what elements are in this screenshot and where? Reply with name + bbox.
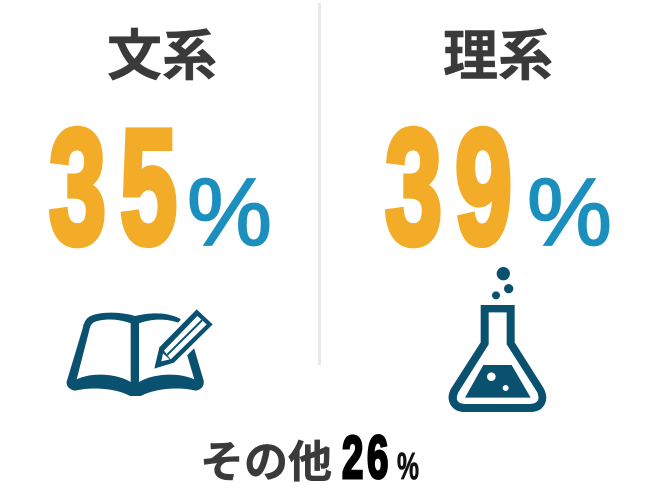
unit: 35 percent sign: % <box>187 159 272 266</box>
figure: 35: 5 <box>120 96 177 278</box>
heading: 文系: 文系 <box>107 25 217 87</box>
figure: 26 <box>342 423 388 488</box>
figure: 35: 3 <box>49 96 106 278</box>
figure: 39 <box>385 96 512 278</box>
label: その他: その他 <box>200 438 332 487</box>
icon: flask with bubbles <box>449 267 546 412</box>
unit: 39 percent sign: % <box>527 159 612 266</box>
icon: open book with pencil <box>67 309 213 396</box>
figure: 39: 9 <box>455 96 512 278</box>
figure: 39: 3 <box>385 96 442 278</box>
figure: 35 <box>49 96 177 278</box>
unit: 26 percent sign: % <box>397 446 419 488</box>
heading: 理系: 理系 <box>443 25 553 87</box>
